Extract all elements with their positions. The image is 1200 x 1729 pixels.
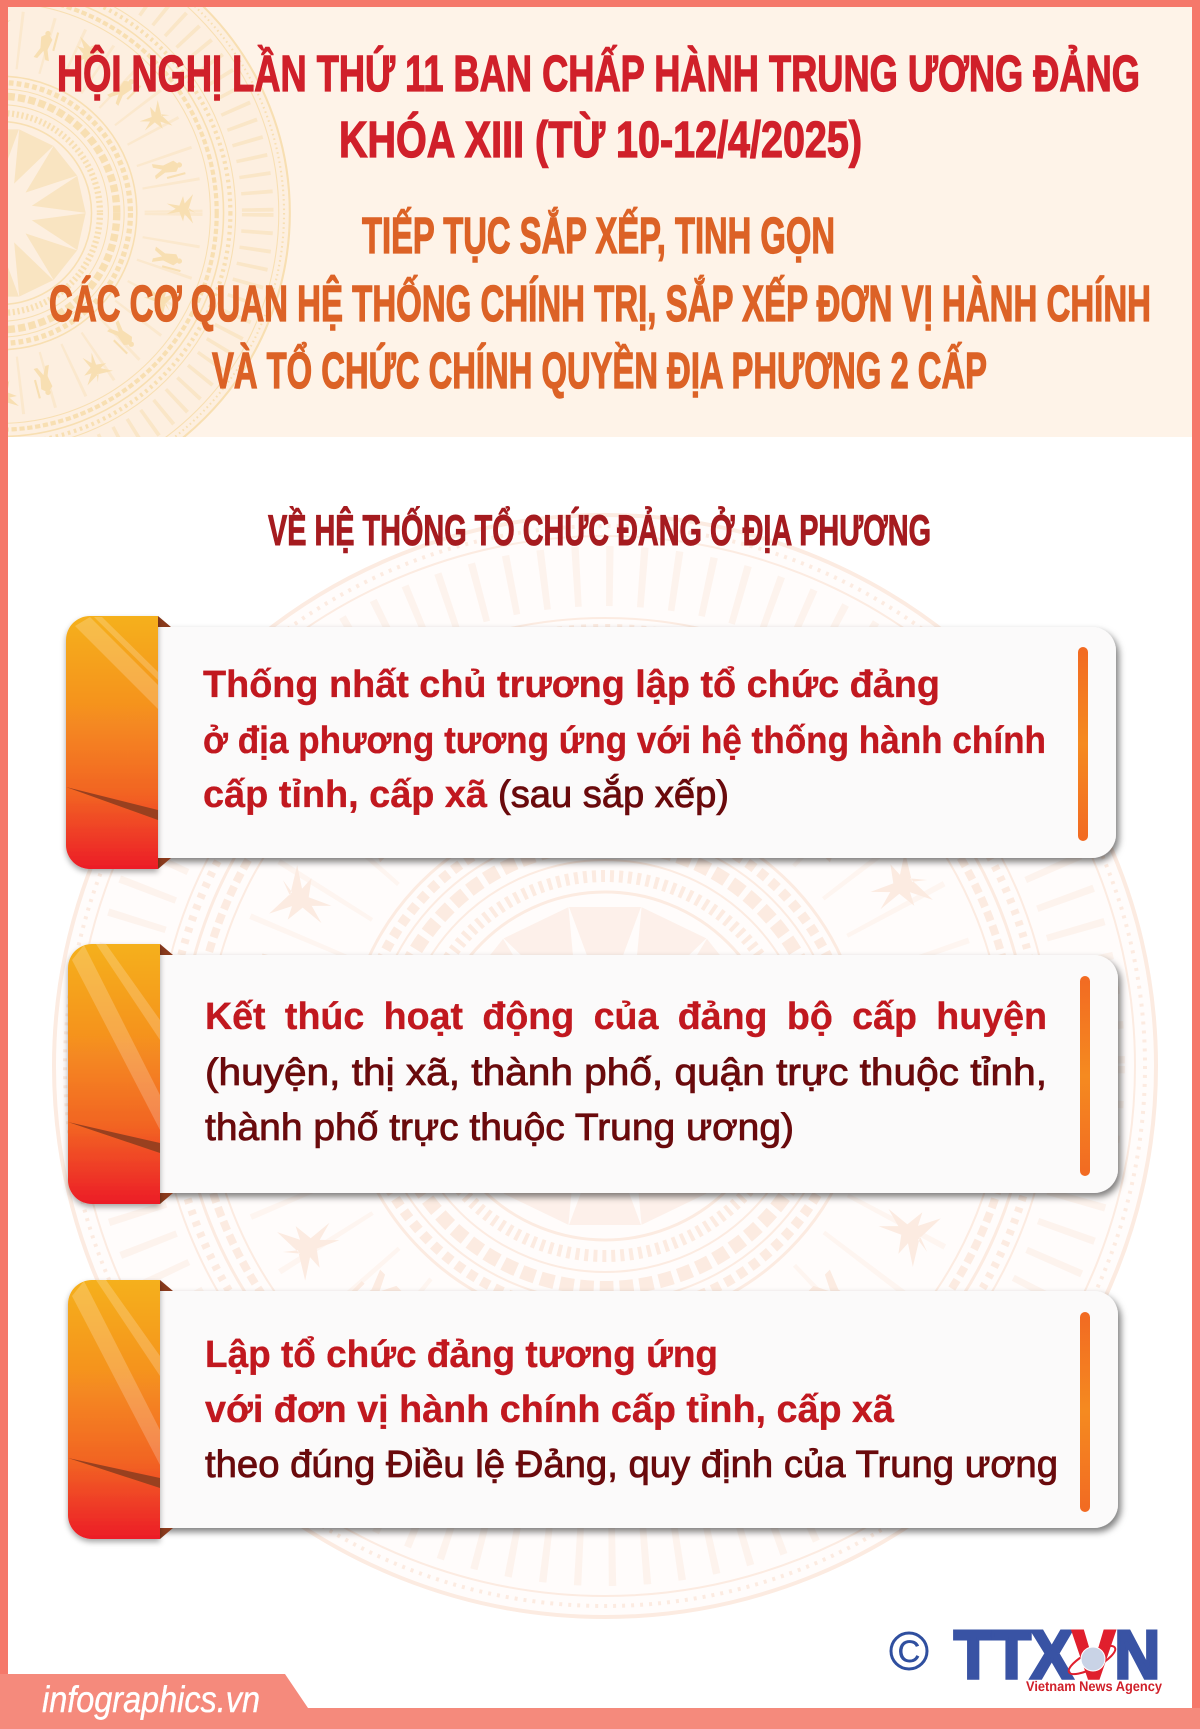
panel: card 2 — [68, 944, 1118, 1204]
card 3 folds — [160, 1280, 173, 1539]
card 1 text: (sau sắp xếp) — [498, 774, 729, 816]
card 1 accent bar — [1078, 647, 1088, 841]
card 3 white body — [160, 1291, 1118, 1528]
card 2 folds — [160, 944, 173, 1204]
card 2 text — [205, 996, 1047, 1149]
card 3 text: Lập tổ chức đảng tương ứng — [205, 1334, 718, 1376]
footer band — [0, 1674, 1200, 1729]
card 2 text: Kết thúc hoạt động của đảng bộ cấp huyện — [205, 996, 1047, 1038]
card 1 orange tab — [66, 616, 158, 869]
card 2 white body — [160, 955, 1118, 1193]
watermark: bronze drum — [54, 515, 1156, 1617]
card 3 text: với đơn vị hành chính cấp tỉnh, cấp xã — [205, 1389, 895, 1431]
subtitle: main topic — [49, 207, 1151, 399]
footer: site name: infographics.vn — [42, 1679, 260, 1720]
card 1 text: Thống nhất chủ trương lập tổ chức đảng — [203, 664, 940, 706]
title: conference name: KHÓA XIII (TỪ 10-12/4/2025) — [339, 111, 862, 168]
logo: TTXVN: Vietnam News Agency — [1026, 1678, 1162, 1694]
card 3 text — [205, 1334, 1058, 1486]
card 3 orange tab — [68, 1280, 160, 1539]
icon: copyright — [891, 1633, 927, 1669]
card 3 accent bar — [1080, 1312, 1090, 1512]
subtitle: main topic: TIẾP TỤC SẮP XẾP, TINH GỌN — [362, 207, 835, 264]
title: conference name — [57, 45, 1140, 168]
panel: header background with drum — [8, 7, 1192, 437]
logo: TTXVN: TTXVN — [954, 1617, 1160, 1693]
card 2 orange tab — [68, 944, 160, 1204]
icon: copyright: C — [898, 1634, 920, 1669]
card 1 text: cấp tỉnh, cấp xã — [203, 774, 488, 816]
card 1 white body — [158, 627, 1116, 858]
card 1 text — [203, 664, 1046, 816]
card 1 folds — [158, 616, 171, 869]
card 2 text: thành phố trực thuộc Trung ương) — [205, 1107, 794, 1149]
card 2 text: (huyện, thị xã, thành phố, quận trực thuộc tỉnh, — [205, 1052, 1047, 1094]
card 3 text: theo đúng Điều lệ Đảng, quy định của Trung ương — [205, 1444, 1058, 1486]
card 2 accent bar — [1080, 976, 1090, 1176]
card 1 text: ở địa phương tương ứng với hệ thống hành chính — [203, 720, 1046, 762]
panel: card 3 — [68, 1280, 1118, 1539]
panel: card 1 — [66, 616, 1116, 869]
